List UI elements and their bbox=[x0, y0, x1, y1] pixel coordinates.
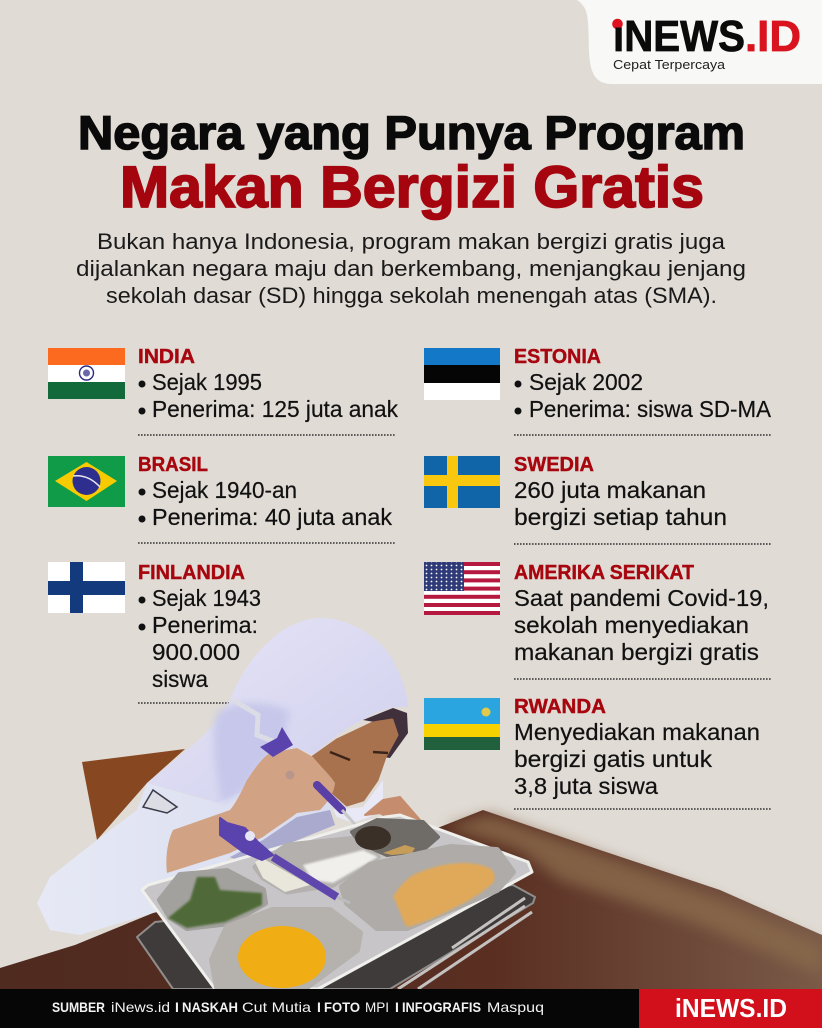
compartment: vegetables bbox=[160, 871, 265, 928]
flag: Rwanda bbox=[424, 698, 500, 750]
lower tray metal stripes bbox=[398, 898, 532, 989]
entry: India bbox=[138, 346, 398, 435]
entry: Estonia bbox=[514, 346, 772, 435]
logo panel: iNews.id: .ID bbox=[745, 12, 801, 61]
entry: Estonia: Penerima: siswa SD-MA bbox=[529, 396, 772, 422]
entry: Brasil: Sejak 1940-an bbox=[152, 477, 297, 503]
entry: Amerika Serikat: Saat pandemi Covid-19, bbox=[514, 585, 769, 611]
title bbox=[78, 106, 745, 220]
fried chicken bbox=[393, 863, 495, 927]
entry: Finlandia: FINLANDIA bbox=[138, 562, 245, 584]
logo panel: iNews.id bbox=[577, 0, 822, 84]
compartment: spoon bbox=[352, 820, 438, 855]
flag: Finlandia bbox=[48, 562, 125, 613]
footer bar: INFOGRAFIS bbox=[402, 999, 481, 1015]
entry: Rwanda: bergizi gatis untuk bbox=[514, 746, 713, 772]
food piece bbox=[383, 845, 415, 855]
entry: Finlandia: Sejak 1943 bbox=[152, 585, 261, 611]
face bbox=[313, 720, 397, 805]
entry: Finlandia: Penerima: bbox=[152, 612, 258, 638]
footer bar: iNews.id bbox=[111, 999, 170, 1015]
arm and hand bbox=[166, 748, 335, 873]
entry: Amerika Serikat: AMERIKA SERIKAT bbox=[514, 562, 694, 584]
eyes bbox=[330, 752, 388, 760]
badge bbox=[143, 790, 177, 813]
hair bbox=[363, 708, 408, 758]
entry: Rwanda: 3,8 juta siswa bbox=[514, 773, 658, 799]
compartment: chicken bbox=[342, 847, 513, 928]
hijab lace bbox=[233, 700, 275, 742]
entry: Amerika Serikat bbox=[514, 562, 771, 679]
compartment: rice bbox=[255, 838, 378, 892]
intro text: sekolah dasar (SD) hingga sekolah menengah atas (SMA). bbox=[106, 283, 717, 308]
logo panel: iNews.id: ıNEWS bbox=[613, 12, 745, 61]
orange bbox=[238, 926, 326, 988]
photo: girl eating school lunch bbox=[0, 618, 822, 989]
flag: Swedia bbox=[424, 456, 500, 508]
footer bar: I bbox=[395, 999, 399, 1015]
flag: Brasil bbox=[48, 456, 125, 507]
hijab bbox=[147, 618, 408, 803]
vegetables bbox=[168, 877, 262, 928]
hijab inner drape shadow bbox=[214, 703, 290, 803]
entry: India: INDIA bbox=[138, 346, 195, 368]
entry: Swedia bbox=[514, 454, 771, 544]
pen in hand and spoon bbox=[317, 785, 342, 810]
intro text bbox=[76, 229, 746, 308]
entry: Estonia: Sejak 2002 bbox=[529, 369, 643, 395]
footer bar: MPI bbox=[365, 999, 389, 1015]
compartment: orange bbox=[212, 910, 360, 987]
footer bar: NASKAH bbox=[182, 999, 238, 1015]
lower tray bbox=[137, 885, 535, 989]
entry: Swedia: SWEDIA bbox=[514, 454, 594, 476]
rice bbox=[303, 850, 378, 883]
main tray bbox=[142, 815, 532, 989]
white food patch bbox=[255, 858, 310, 892]
entry: Brasil: BRASIL bbox=[138, 454, 208, 476]
title: Makan Bergizi Gratis bbox=[120, 155, 704, 220]
table bbox=[0, 810, 822, 989]
entry: Rwanda bbox=[514, 696, 771, 809]
entry: Estonia: ESTONIA bbox=[514, 346, 601, 368]
footer bar: Maspuq bbox=[487, 999, 544, 1015]
pen topper bbox=[220, 818, 273, 860]
topper eye bbox=[245, 831, 255, 841]
entry: Rwanda: RWANDA bbox=[514, 696, 606, 718]
intro text: dijalankan negara maju dan berkembang, menjangkau jenjang bbox=[76, 256, 746, 281]
logo panel: iNews.id: Cepat Terpercaya bbox=[613, 57, 726, 72]
footer bar bbox=[0, 989, 822, 1028]
footer bar: iNEWS.ID bbox=[675, 993, 787, 1023]
entry: Finlandia: siswa bbox=[152, 666, 208, 692]
entry: Finlandia: 900.000 bbox=[152, 639, 240, 665]
entry: Swedia: bergizi setiap tahun bbox=[514, 504, 727, 530]
entry: India: Sejak 1995 bbox=[152, 369, 262, 395]
flag: Estonia bbox=[424, 348, 500, 400]
entry: India: Penerima: 125 juta anak bbox=[152, 396, 398, 422]
collar bbox=[333, 780, 383, 823]
footer bar: I bbox=[317, 999, 321, 1015]
footer bar: I bbox=[175, 999, 179, 1015]
entry: Brasil bbox=[138, 454, 395, 543]
blouse shadow below arm bbox=[230, 810, 335, 862]
entry: Finlandia bbox=[138, 562, 261, 703]
footer bar: FOTO bbox=[324, 999, 360, 1015]
title: Negara yang Punya Program bbox=[78, 106, 745, 159]
footer bar: SUMBER bbox=[52, 999, 105, 1015]
entry: Swedia: 260 juta makanan bbox=[514, 477, 706, 503]
purple pen bbox=[273, 857, 337, 897]
intro text: Bukan hanya Indonesia, program makan bergizi gratis juga bbox=[97, 229, 726, 254]
flag: India bbox=[48, 348, 125, 399]
flag: Amerika Serikat bbox=[424, 562, 500, 615]
spoon head bbox=[355, 826, 391, 850]
footer bar: Cut Mutia bbox=[242, 999, 311, 1015]
ring bbox=[286, 770, 294, 780]
fingers bbox=[365, 797, 420, 823]
uniform bbox=[37, 753, 333, 935]
entry: Brasil: Penerima: 40 juta anak bbox=[152, 504, 392, 530]
entry: Amerika Serikat: sekolah menyediakan bbox=[514, 612, 749, 638]
entry: Rwanda: Menyediakan makanan bbox=[514, 719, 760, 745]
entry: Amerika Serikat: makanan bergizi gratis bbox=[514, 639, 759, 665]
chair bbox=[82, 749, 185, 840]
